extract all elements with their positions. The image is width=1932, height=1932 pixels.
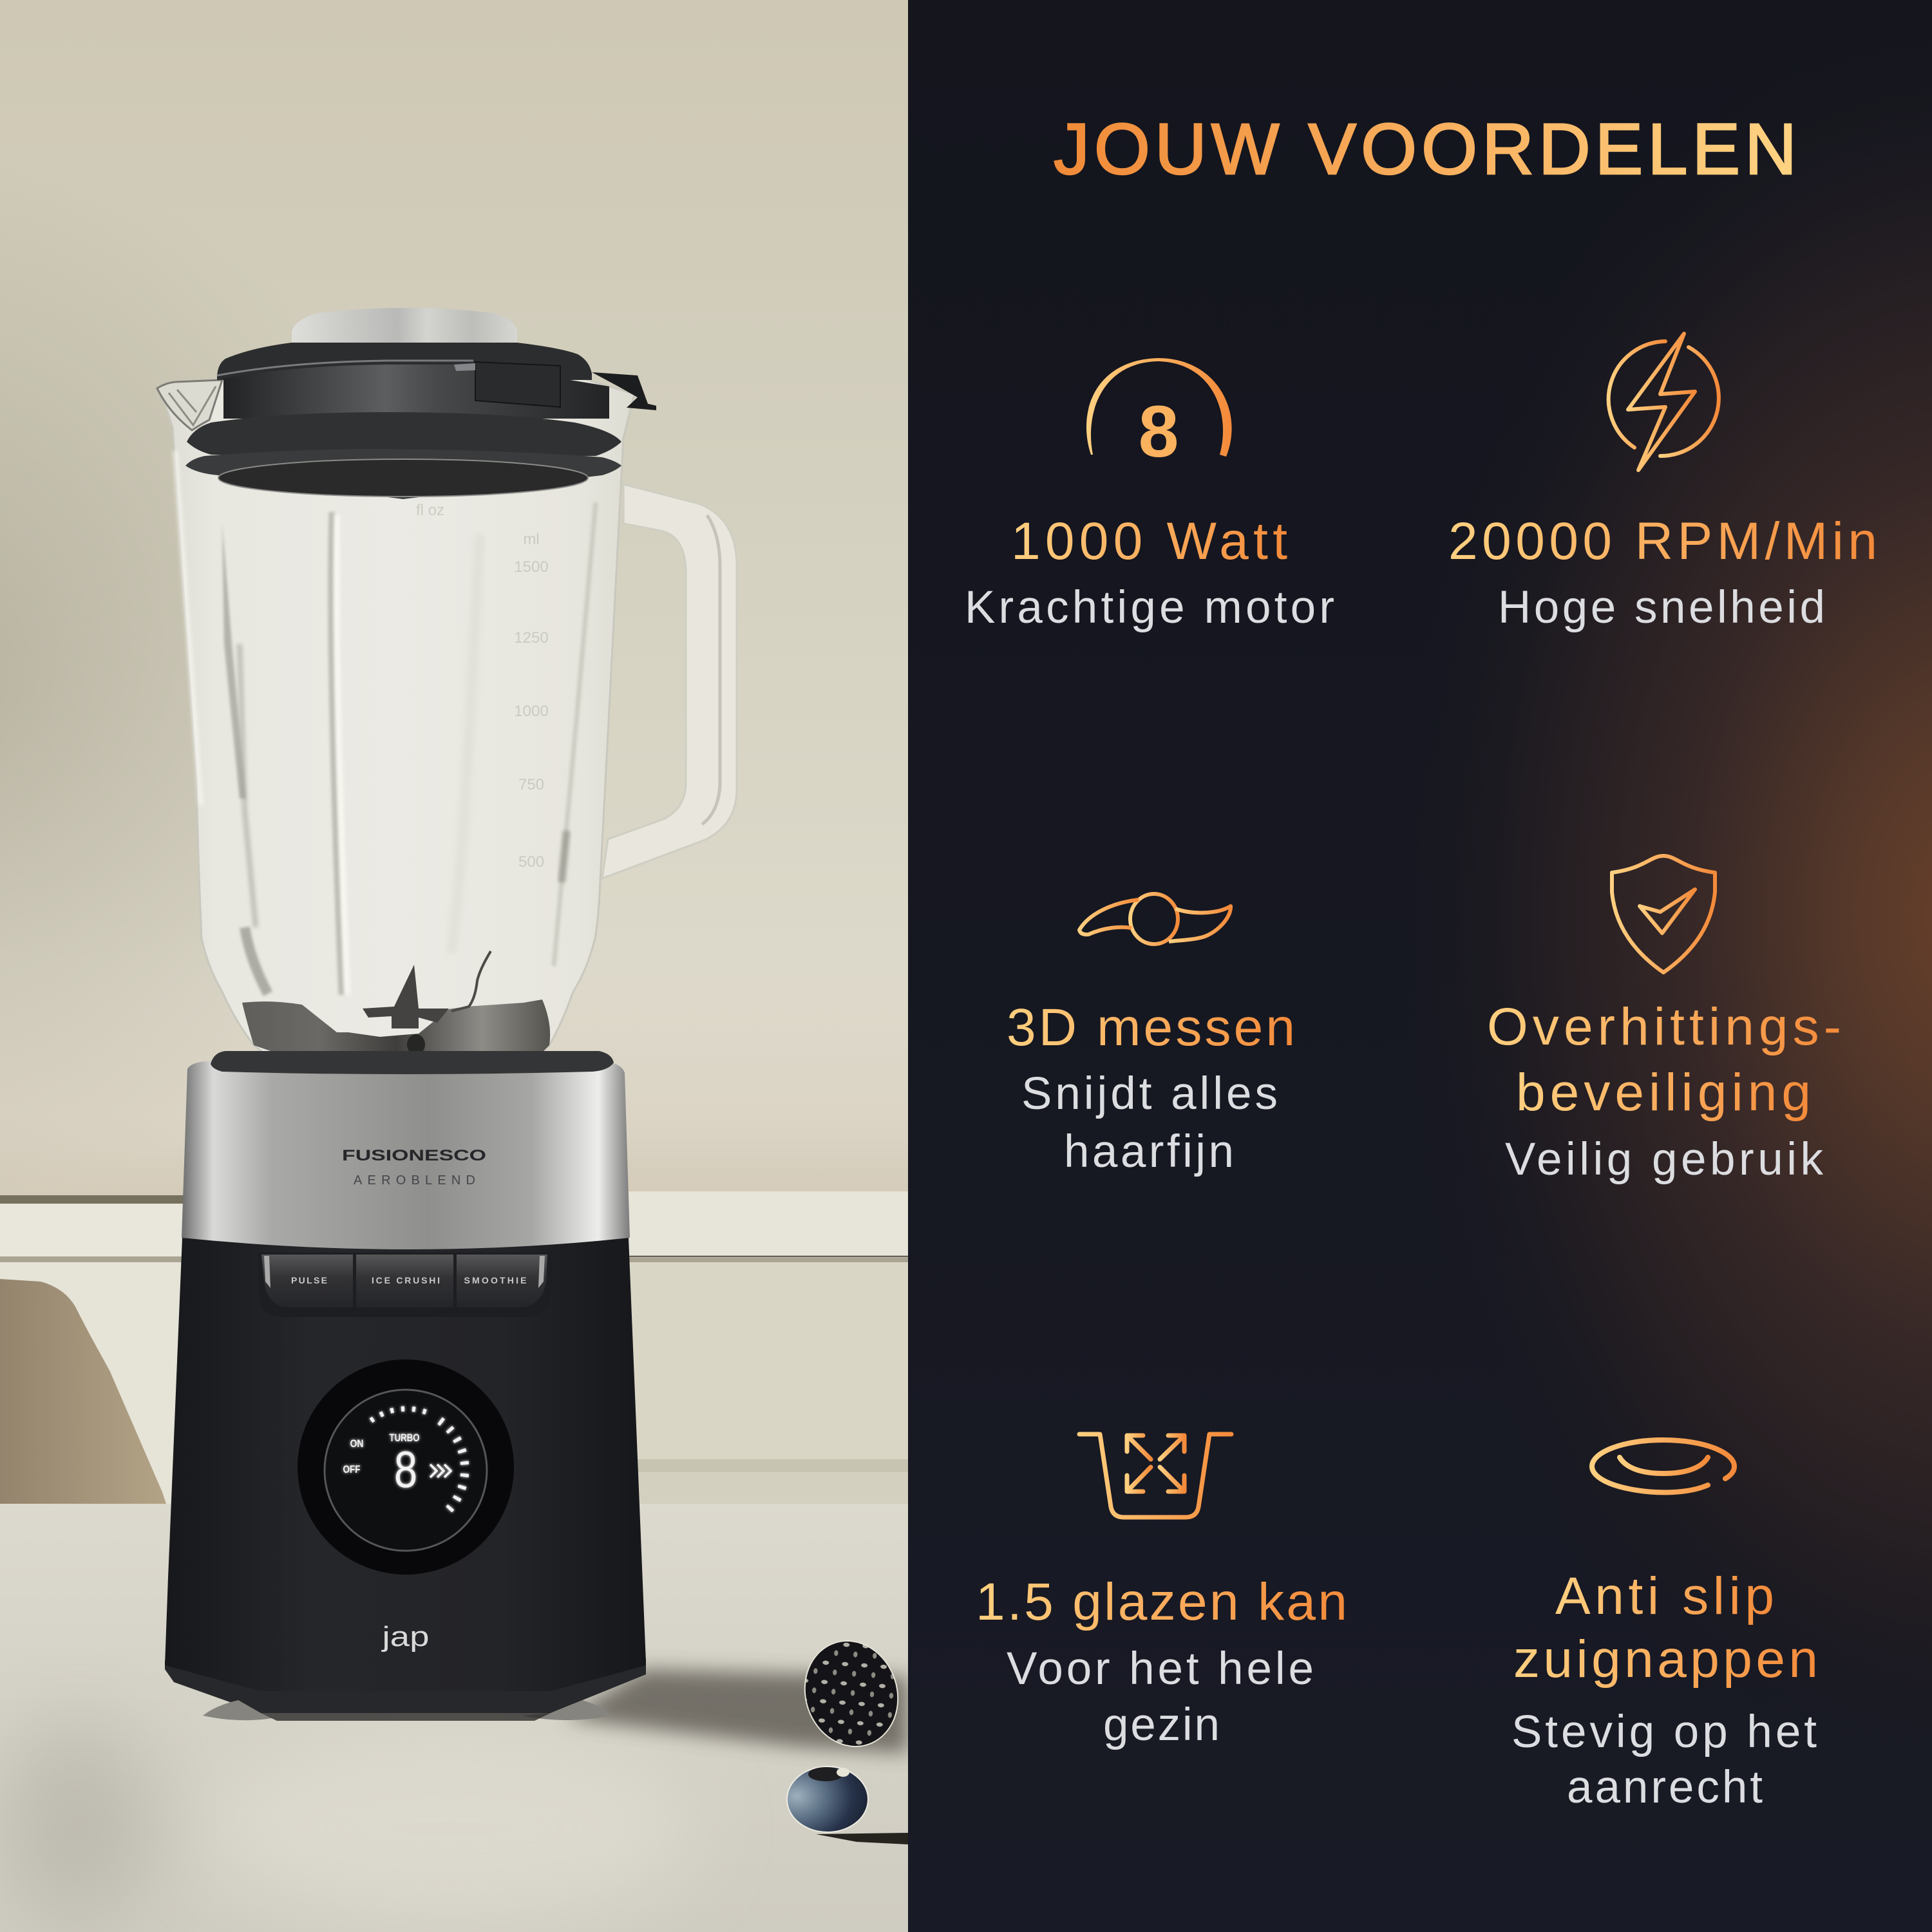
- description: Krachtige motor: [965, 582, 1334, 633]
- description: Hoge snelheid: [1498, 582, 1825, 633]
- icon: suction cup: [1592, 1440, 1734, 1492]
- mode buttons: [258, 1253, 553, 1317]
- icon: power gauge: 8: [1139, 391, 1179, 472]
- lid top: [217, 343, 592, 380]
- heading: 1000 Watt: [1011, 512, 1287, 571]
- lid upper flange: [187, 412, 621, 456]
- lid band: [223, 365, 609, 419]
- heading: Anti slip: [1555, 1567, 1774, 1625]
- blender: [157, 308, 737, 1721]
- description: Voor het hele: [1007, 1643, 1314, 1694]
- measuring scale: 1500: [514, 558, 549, 576]
- blades: [242, 951, 550, 1056]
- icon: jar capacity: [1079, 1434, 1231, 1517]
- measuring scale: 750: [518, 776, 544, 793]
- description: Veilig gebruik: [1505, 1134, 1824, 1185]
- measuring scale: ml: [523, 531, 540, 548]
- glass jar: [157, 377, 634, 1058]
- description: Snijdt alles: [1021, 1068, 1278, 1119]
- icon: lightning bolt: [1609, 334, 1719, 470]
- feature: overheating: [1487, 856, 1841, 1185]
- panel background: [908, 0, 1932, 1932]
- feature: suction: [1511, 1440, 1818, 1813]
- brand name: FUSIONESCO: [342, 1147, 486, 1164]
- lid tab: [592, 372, 656, 410]
- feature: blades: [1007, 894, 1295, 1177]
- blackberry: [791, 1629, 911, 1759]
- heading: 3D messen: [1007, 998, 1295, 1057]
- feature: speed: [1448, 334, 1877, 633]
- measuring scale: 1000: [514, 703, 549, 720]
- measuring scale: 500: [518, 853, 544, 871]
- measuring scale: [416, 502, 549, 871]
- heading line 2: zuignappen: [1513, 1630, 1818, 1689]
- control dial: 8: [394, 1441, 417, 1498]
- gasket: [211, 1051, 614, 1074]
- motor base: [165, 1238, 646, 1721]
- photo background: kitchen: [0, 0, 908, 1932]
- mode buttons: ICE CRUSHI: [372, 1275, 440, 1285]
- description: Stevig op het: [1511, 1707, 1817, 1757]
- title: JOUW VOORDELEN: [1054, 109, 1797, 189]
- model name: AEROBLEND: [354, 1173, 475, 1188]
- description line 2: aanrecht: [1567, 1762, 1763, 1813]
- icon: blade: [1079, 894, 1231, 944]
- measuring scale: fl oz: [416, 502, 444, 519]
- handle: [602, 484, 737, 878]
- icon: power gauge: [1086, 358, 1232, 472]
- blueberry: [787, 1766, 908, 1844]
- jap logo: jap: [381, 1621, 429, 1653]
- blender shadow on counter: [567, 1669, 908, 1753]
- metal collar: [182, 1051, 630, 1249]
- control dial: ON: [350, 1437, 363, 1450]
- panel: product photo: [0, 0, 911, 1932]
- measuring scale: 1250: [514, 629, 549, 647]
- pour spout: [157, 380, 222, 430]
- mode buttons: SMOOTHIE: [464, 1275, 527, 1285]
- heading line 2: beveiliging: [1516, 1063, 1811, 1122]
- control dial: [298, 1359, 514, 1575]
- panel: benefits: [908, 0, 1932, 1932]
- mode buttons: PULSE: [291, 1275, 327, 1285]
- heading: 1.5 glazen kan: [976, 1573, 1347, 1631]
- lid lower flange: [185, 449, 621, 499]
- heading: Overhittings-: [1487, 998, 1841, 1056]
- feature: jar: [976, 1434, 1347, 1750]
- lid cap: [292, 308, 517, 343]
- control dial: OFF: [343, 1463, 361, 1475]
- heading: 20000 RPM/Min: [1448, 512, 1877, 571]
- description line 2: gezin: [1103, 1700, 1220, 1750]
- icon: shield: [1612, 856, 1715, 972]
- lid: [185, 308, 656, 499]
- suction feet: [203, 1700, 272, 1720]
- description line 2: haarfijn: [1064, 1126, 1234, 1177]
- control dial: TURBO: [389, 1432, 420, 1444]
- feature: motor: [965, 358, 1334, 633]
